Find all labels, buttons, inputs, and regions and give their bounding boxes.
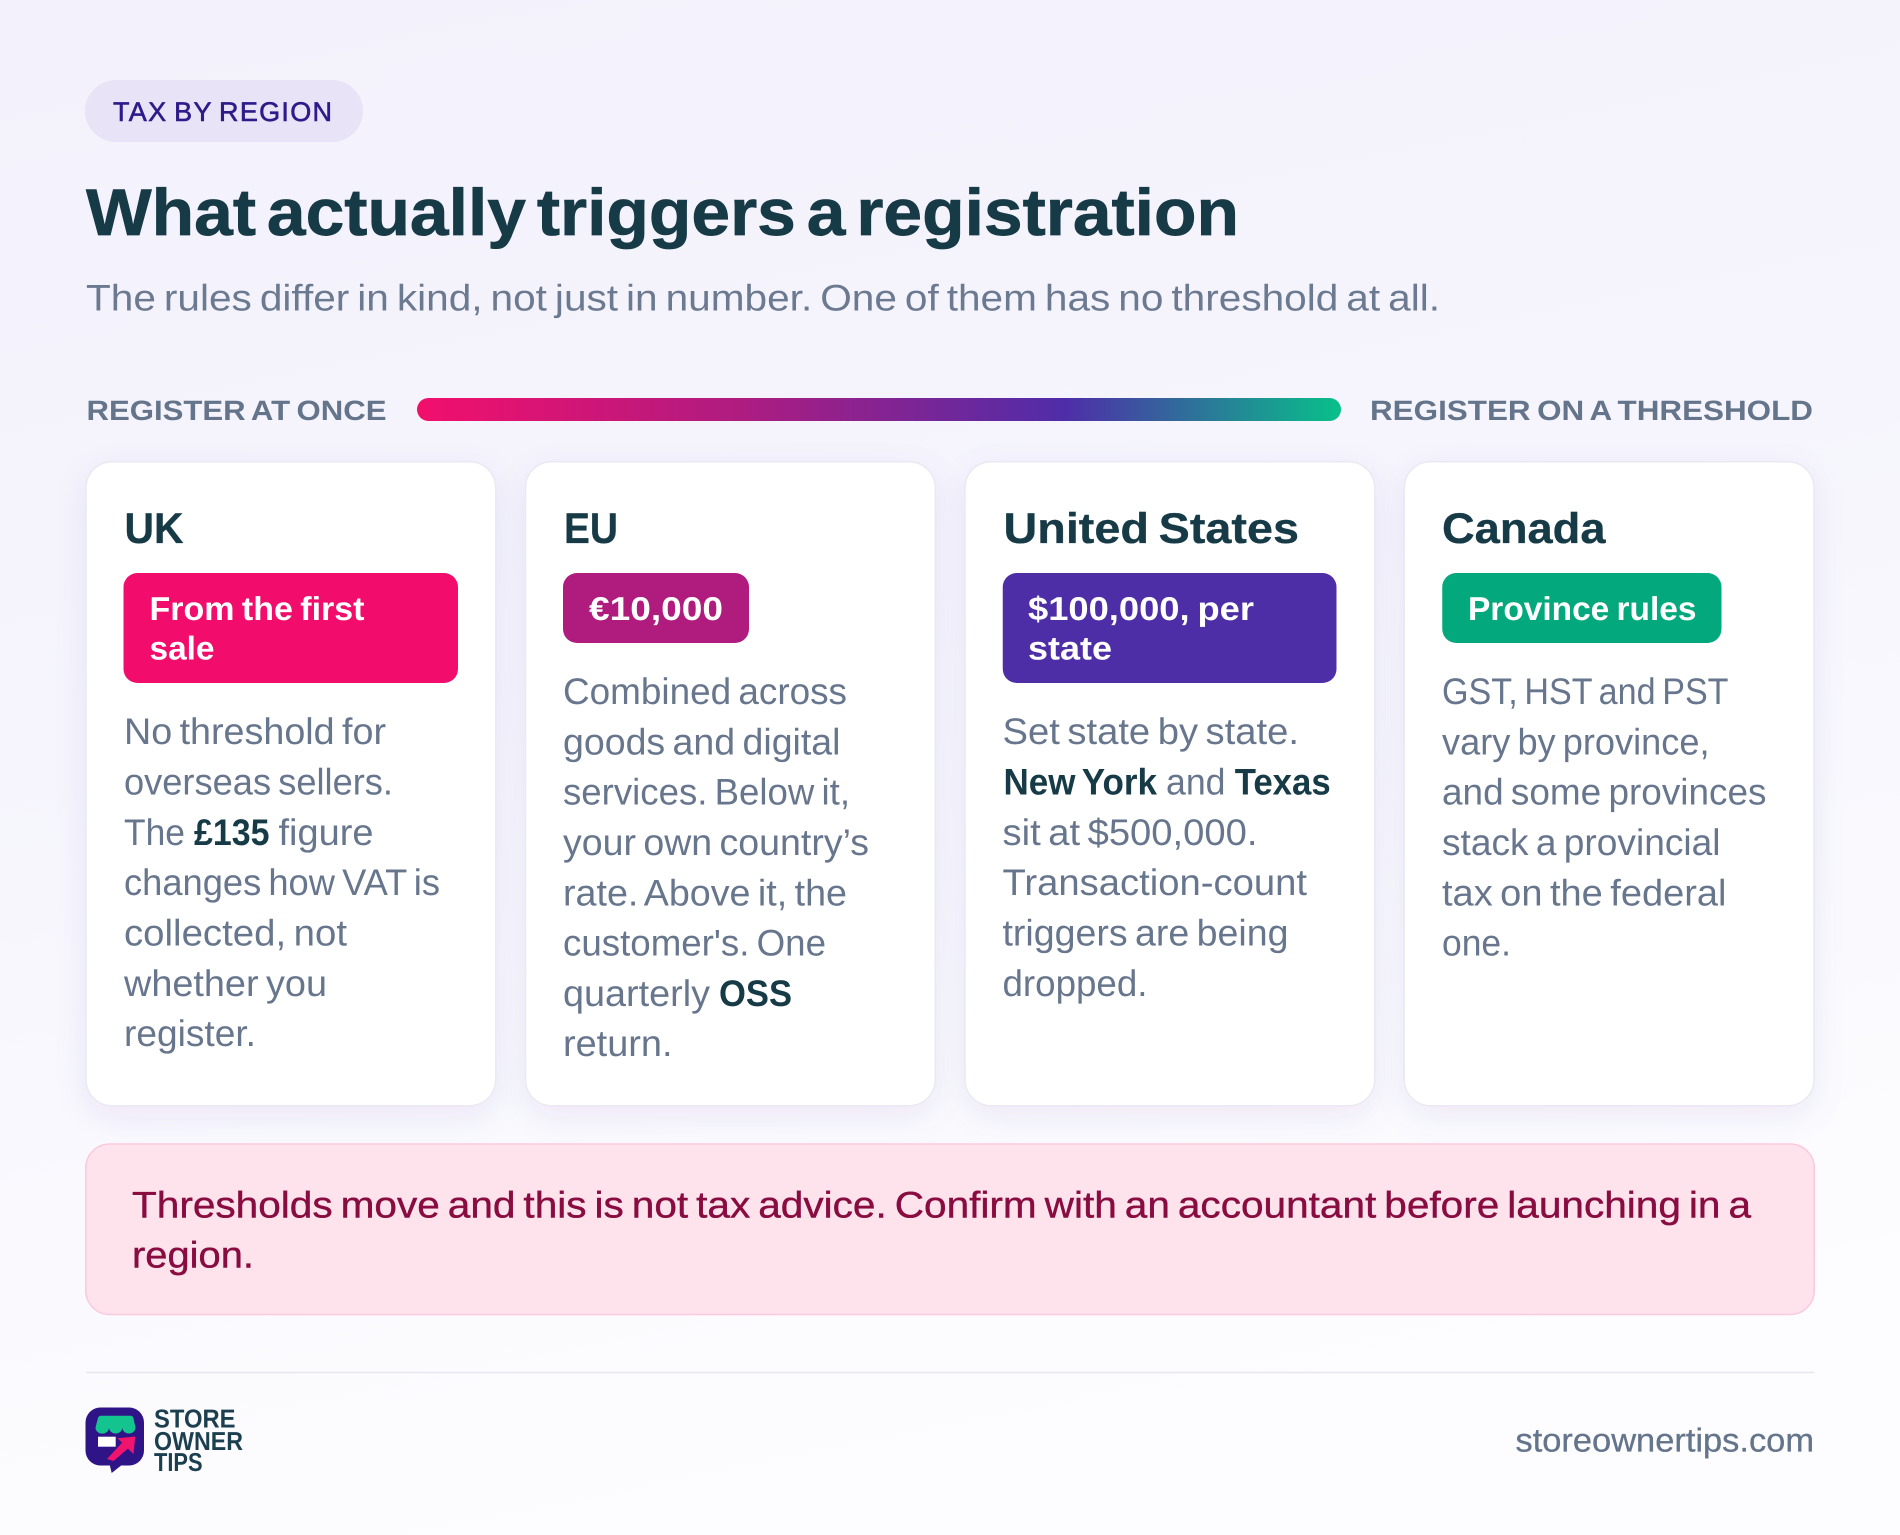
body text: UK: The [124,812,185,853]
body text: Canada: tax on the federal [1442,872,1726,913]
footer logo: Store Owner Tips [86,1404,243,1477]
body text: Canada: GST, HST and PST [1442,671,1728,712]
body text: United States: and [1166,761,1226,802]
body text: Canada [1442,671,1766,964]
body text: United States: New York [1004,761,1157,802]
callout: tax advice warning: Thresholds move and this is not tax advice. Confirm with an accountant before launching in a [132,1184,1751,1225]
body text: United States: Set state by state. [1002,711,1299,752]
body text: EU: quarterly [563,973,711,1014]
panel: Canada [1404,462,1814,1106]
wordmark: TIPS [154,1447,202,1477]
body text: EU: services. Below it, [563,772,850,813]
badge: province rules: Province rules [1468,590,1696,627]
panel: UK [86,462,496,1106]
body text: United States: Transaction-count [1002,862,1308,903]
badge: 10,000 euro threshold [563,573,749,643]
wordmark: STORE [154,1404,236,1434]
icon: storefront speech bubble with arrow [86,1408,144,1473]
heading: EU: EU [564,505,618,553]
callout: tax advice warning: region. [132,1234,254,1276]
body text: UK: whether you [123,963,327,1004]
body text: United States: dropped. [1002,963,1148,1004]
badge: province rules [1442,573,1722,643]
eyebrow pill: tax by region [85,80,363,142]
body text: UK: register. [124,1013,256,1054]
body text: Canada: vary by province, [1442,721,1710,762]
body text: UK: changes how VAT is [124,862,440,903]
body text: EU [563,671,869,1064]
badge: from the first sale [124,573,458,683]
body text: EU: Combined across [563,671,847,712]
badge: from the first sale: sale [150,630,214,666]
body text: EU: your own country’s [563,822,869,863]
body text: UK [123,711,440,1054]
subtitle: The rules differ in kind, not just in number. One of them has no threshold at all. [86,278,1440,318]
heading: United States: United States [1004,505,1299,553]
heading: UK: UK [124,505,184,553]
badge: 100,000 dollars per state: $100,000, per [1028,590,1254,627]
body text: Canada: and some provinces [1442,772,1766,813]
panel: United States [965,462,1375,1106]
body text: United States: Texas [1235,761,1331,802]
panel: EU [526,462,935,1106]
body text: United States: sit at $500,000. [1002,812,1258,853]
body text: Canada: stack a provincial [1442,822,1720,863]
heading: Canada: Canada [1442,505,1607,553]
badge: 10,000 euro threshold: €10,000 [589,590,723,627]
eyebrow pill: tax by region: TAX BY REGION [113,97,332,127]
callout: tax advice warning [86,1144,1814,1314]
body text: EU: return. [563,1023,672,1064]
title: What actually triggers a registration [86,175,1239,249]
body text: UK: collected, not [124,913,348,954]
badge: 100,000 dollars per state [1003,573,1336,683]
body text: UK: overseas sellers. [124,761,393,802]
body text: United States [1002,711,1331,1004]
body text: EU: customer's. One [563,923,826,964]
spectrum scale: register at once to register on a threshold [86,395,1813,426]
body text: United States: triggers are being [1002,913,1288,954]
body text: UK: figure [278,812,374,853]
body text: Canada: one. [1442,923,1511,964]
badge: from the first sale: From the first [150,590,365,627]
scale label: right: REGISTER ON A THRESHOLD [1370,395,1813,426]
body text: EU: rate. Above it, the [563,872,847,913]
badge: 100,000 dollars per state: state [1028,630,1112,666]
body text: EU: goods and digital [563,721,840,762]
gradient bar [417,398,1341,421]
wordmark: OWNER [154,1426,243,1456]
scale label: left: REGISTER AT ONCE [86,395,386,426]
body text: UK: £135 [194,812,270,853]
body text: UK: No threshold for [124,711,386,752]
footer url: storeownertips.com [1516,1422,1814,1459]
wordmark [154,1404,243,1477]
body text: EU: OSS [719,973,792,1014]
